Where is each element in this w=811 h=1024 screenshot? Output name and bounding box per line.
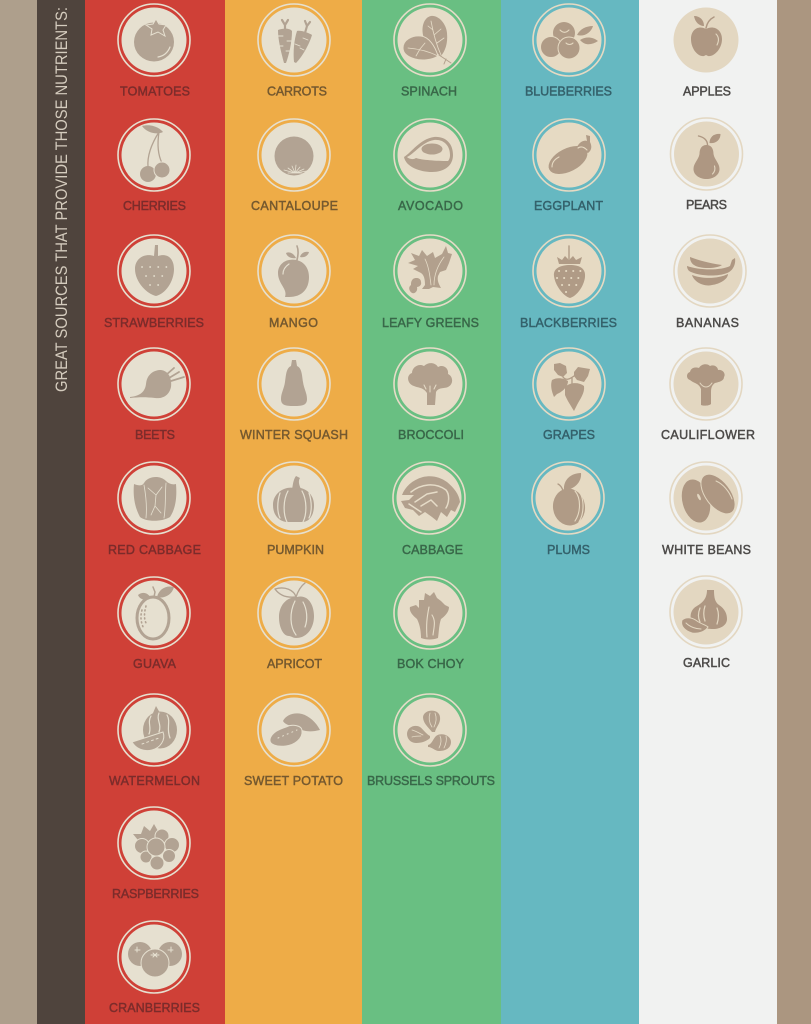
label: STRAWBERRIES xyxy=(104,316,204,330)
label: MANGO xyxy=(269,316,318,330)
icon: watermelon xyxy=(118,694,190,766)
label: WINTER SQUASH xyxy=(240,428,348,442)
label: AVOCADO xyxy=(398,199,463,213)
item: strawberries xyxy=(104,235,204,330)
icon: red cabbage xyxy=(118,462,190,534)
label: PUMPKIN xyxy=(267,543,324,557)
label: LEAFY GREENS xyxy=(382,316,479,330)
icon: brussels sprouts xyxy=(394,694,466,766)
item: cherries xyxy=(118,119,190,213)
icon: cabbage xyxy=(393,462,465,534)
item: tomatoes xyxy=(118,4,190,98)
item: carrots xyxy=(258,4,330,98)
item: eggplant xyxy=(533,119,605,213)
icon: pear xyxy=(670,118,742,190)
label: TOMATOES xyxy=(120,84,190,98)
item: avocado xyxy=(394,119,466,213)
label: RED CABBAGE xyxy=(108,543,201,557)
label: BANANAS xyxy=(676,316,739,330)
item: red cabbage xyxy=(108,462,201,557)
item: spinach xyxy=(394,4,466,98)
icon: blackberry xyxy=(533,235,605,307)
icon: beet xyxy=(118,348,190,420)
label: CABBAGE xyxy=(402,543,463,557)
label: GUAVA xyxy=(133,657,177,671)
background: left margin xyxy=(0,0,37,1024)
panel: heading strip xyxy=(37,0,85,1024)
item: cantaloupe xyxy=(251,119,338,213)
item: grapes xyxy=(533,348,605,442)
item: bok choy xyxy=(394,577,466,671)
icon: spinach xyxy=(394,4,466,76)
panel: white foods column xyxy=(639,0,777,1024)
icon: white beans xyxy=(670,462,742,534)
item: mango xyxy=(258,235,330,330)
item: blackberries xyxy=(520,235,617,330)
icon: tomato xyxy=(118,4,190,76)
icon: cantaloupe xyxy=(258,119,330,191)
label: BLACKBERRIES xyxy=(520,316,617,330)
label: SPINACH xyxy=(401,84,457,98)
icon: eggplant xyxy=(533,119,605,191)
icon: leafy greens xyxy=(394,235,466,307)
panel: red foods column xyxy=(85,0,225,1024)
icon: cranberries xyxy=(118,921,190,993)
label: GRAPES xyxy=(543,428,595,442)
label: BOK CHOY xyxy=(397,657,465,671)
item: cabbage xyxy=(393,462,465,557)
item: leafy greens xyxy=(382,235,479,330)
icon: garlic xyxy=(670,576,742,648)
label: BRUSSELS SPROUTS xyxy=(367,774,495,788)
item: apricot xyxy=(258,577,330,671)
icon: bok choy xyxy=(394,577,466,649)
item: blueberries xyxy=(525,4,612,98)
label: WATERMELON xyxy=(109,774,200,788)
panel: orange foods column xyxy=(225,0,362,1024)
item: brussels sprouts xyxy=(367,694,495,788)
item: white beans xyxy=(662,462,751,557)
label: EGGPLANT xyxy=(534,199,603,213)
item: raspberries xyxy=(112,807,199,901)
item: pears xyxy=(670,118,742,212)
item: apples xyxy=(674,8,738,98)
item: beets xyxy=(118,348,190,442)
icon: guava xyxy=(118,577,190,649)
panel: green foods column xyxy=(362,0,501,1024)
icon: blueberries xyxy=(533,4,605,76)
icon: plum xyxy=(532,462,604,534)
label: BLUEBERRIES xyxy=(525,84,612,98)
icon: winter squash xyxy=(258,348,330,420)
label: GARLIC xyxy=(683,656,730,670)
icon: pumpkin xyxy=(258,462,330,534)
label: CHERRIES xyxy=(123,199,186,213)
item: guava xyxy=(118,577,190,671)
label: PLUMS xyxy=(547,543,590,557)
item: garlic xyxy=(670,576,742,670)
label: RASPBERRIES xyxy=(112,887,199,901)
icon: sweet potatoes xyxy=(258,694,330,766)
label: WHITE BEANS xyxy=(662,543,751,557)
label: BROCCOLI xyxy=(398,428,464,442)
icon: cherries xyxy=(118,119,190,191)
icon: carrots xyxy=(258,4,330,76)
icon: mango xyxy=(258,235,330,307)
background: right margin xyxy=(777,0,811,1024)
label: CAULIFLOWER xyxy=(661,428,755,442)
item: sweet potato xyxy=(244,694,343,788)
icon: grapes xyxy=(533,348,605,420)
item: pumpkin xyxy=(258,462,330,557)
label: CARROTS xyxy=(267,84,327,98)
item: winter squash xyxy=(240,348,348,442)
label: CRANBERRIES xyxy=(109,1001,200,1015)
item: broccoli xyxy=(394,348,466,442)
icon: broccoli xyxy=(394,348,466,420)
label: CANTALOUPE xyxy=(251,199,338,213)
label: APRICOT xyxy=(267,657,322,671)
label: SWEET POTATO xyxy=(244,774,343,788)
icon: avocado xyxy=(394,119,466,191)
label: APPLES xyxy=(683,84,731,98)
label: BEETS xyxy=(135,428,175,442)
item: watermelon xyxy=(109,694,200,788)
icon: apricot xyxy=(258,577,330,649)
panel: blue foods column xyxy=(501,0,639,1024)
icon: raspberry xyxy=(118,807,190,879)
item: cranberries xyxy=(109,921,200,1015)
icon: strawberry xyxy=(118,235,190,307)
item: bananas xyxy=(674,235,746,330)
icon: bananas xyxy=(674,235,746,307)
label: PEARS xyxy=(686,198,727,212)
item: plums xyxy=(532,462,604,557)
icon: apple xyxy=(674,8,738,72)
item: cauliflower xyxy=(661,348,755,442)
icon: cauliflower xyxy=(670,348,742,420)
